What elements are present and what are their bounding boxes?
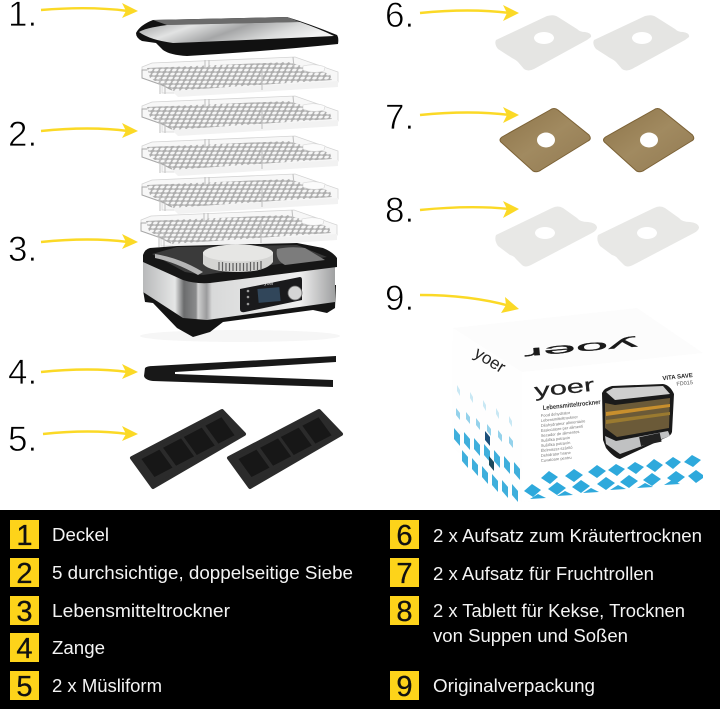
legend item 3: Lebensmitteltrockner	[52, 601, 230, 621]
box model text: VITA SAVE	[662, 373, 693, 382]
legend item 5: 2 x Müsliform	[52, 676, 162, 696]
legend item 9: 9	[396, 671, 413, 703]
callout number 4: 4.	[8, 353, 37, 392]
box language list: Déshydrateur alimentaire	[541, 418, 586, 428]
box product photo	[602, 384, 674, 459]
dehydrator base	[140, 243, 340, 342]
legend item 7: 2 x Aufsatz für Fruchtrollen	[433, 564, 654, 584]
box language list: Dehidrator hrane	[541, 450, 572, 458]
control panel: yoer	[264, 281, 274, 287]
arrow 2	[41, 123, 138, 138]
arrow 8	[420, 201, 519, 218]
box language list: Secador de alimentos	[541, 429, 580, 438]
sieve 1	[142, 57, 338, 97]
arrow 5	[43, 426, 138, 441]
legend item 9	[390, 671, 595, 703]
legend item 7	[390, 558, 654, 590]
legend item 7: 7	[396, 558, 413, 590]
muesli mold 2	[229, 411, 341, 487]
legend item 8: 8	[396, 596, 413, 628]
box front logo: yoer	[533, 375, 595, 402]
legend item 6	[390, 520, 702, 552]
box language list: Sušička potravín	[541, 440, 571, 448]
sieve 2	[142, 96, 338, 136]
box language list: Sušička potravin	[541, 435, 570, 443]
lid	[136, 17, 338, 56]
callout number 9: 9.	[385, 279, 414, 318]
tongs	[144, 356, 336, 387]
legend item 9: Originalverpackung	[433, 676, 595, 696]
legend item 6: 6	[396, 520, 413, 552]
legend item 8: von Suppen und Soßen	[433, 626, 628, 646]
legend item 1	[10, 520, 109, 552]
legend item 8: 2 x Tablett für Kekse, Trocknen	[433, 601, 685, 621]
legend item 3: 3	[16, 596, 33, 628]
legend item 4: 4	[16, 633, 33, 665]
legend item 3	[10, 596, 230, 628]
legend item 5	[10, 671, 162, 703]
control panel	[240, 277, 302, 312]
sieve 5	[141, 210, 337, 250]
callout number 3: 3.	[8, 230, 37, 269]
box language list: Élelmiszer-szárító	[541, 445, 573, 453]
box language list: Lebensmitteltrockner	[541, 414, 579, 423]
box model text: FD015	[676, 380, 693, 388]
arrow 4	[41, 364, 138, 379]
legend item 6: 2 x Aufsatz zum Kräutertrocknen	[433, 526, 702, 546]
original packaging box	[452, 308, 703, 502]
white background	[0, 0, 720, 510]
legend item 1: Deckel	[52, 525, 109, 545]
legend item 2: 5 durchsichtige, doppelseitige Siebe	[52, 563, 353, 583]
legend item 5: 5	[16, 671, 33, 703]
callout number 8: 8.	[385, 191, 414, 230]
box language list	[541, 410, 586, 463]
fan	[203, 244, 273, 272]
arrow 6	[420, 5, 519, 21]
fruit roll sheet pair	[500, 108, 694, 172]
arrow 9	[420, 295, 519, 313]
box side logo: yoer	[471, 343, 509, 377]
sieve 4	[142, 174, 338, 214]
callout number 2: 2.	[8, 115, 37, 154]
box side diamond pattern	[454, 385, 520, 502]
cookie tray pair	[495, 206, 699, 266]
box language list: Food dehydrator	[541, 410, 571, 418]
sieve 3	[142, 136, 338, 176]
legend item 4: Zange	[52, 638, 105, 658]
box top logo: yoer	[523, 336, 638, 362]
legend item 8	[390, 596, 685, 646]
callout number 5: 5.	[8, 420, 37, 459]
arrow 1	[41, 3, 138, 18]
arrow 3	[41, 234, 138, 249]
legend item 2: 2	[16, 558, 33, 590]
box title: Lebensmitteltrockner	[542, 399, 601, 412]
legend item 4	[10, 633, 105, 665]
box language list: Essiccatore per alimenti	[541, 424, 583, 433]
arrow 7	[420, 107, 519, 123]
box model text	[662, 373, 693, 388]
callout number 7: 7.	[385, 98, 414, 137]
box front diamond pattern	[524, 455, 703, 499]
legend panel	[0, 510, 720, 709]
legend item 1: 1	[16, 520, 33, 552]
box language list: Cuvatoare pentru	[541, 455, 572, 463]
legend item 2	[10, 558, 353, 590]
muesli mold 1	[132, 411, 244, 487]
herb tray pair	[495, 15, 689, 70]
